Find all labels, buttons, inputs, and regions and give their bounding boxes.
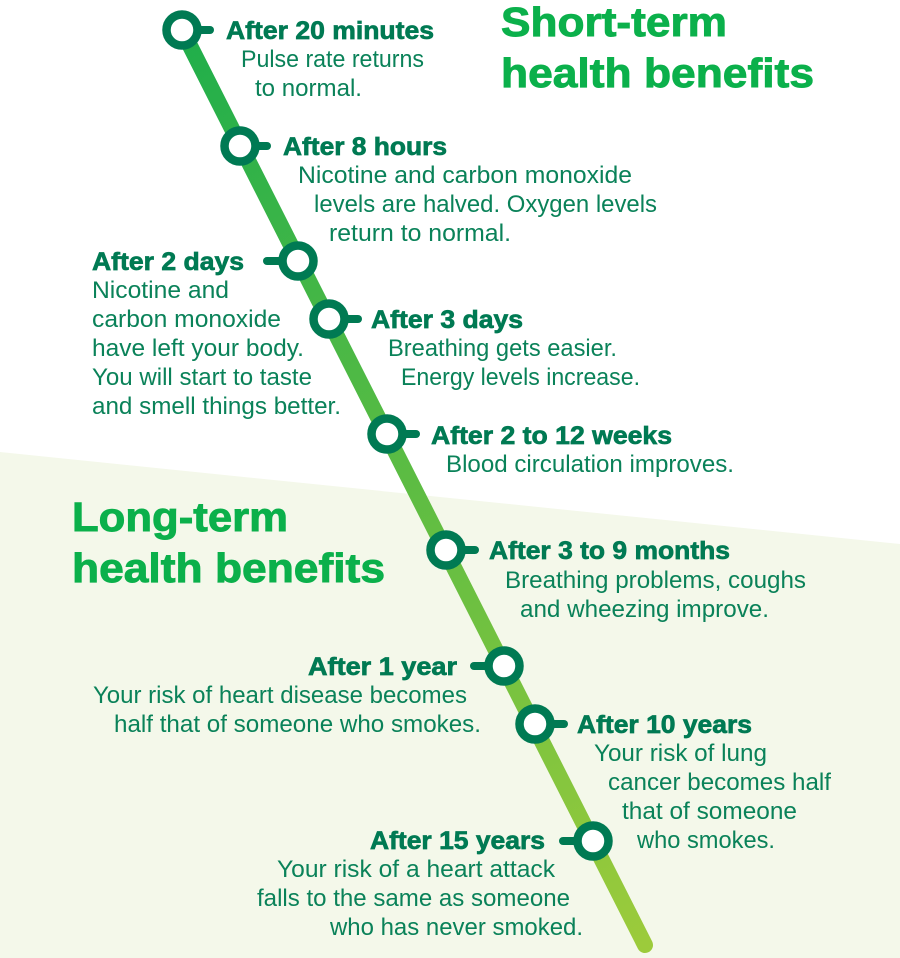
text: after 20 minutes: Pulse rate returns bbox=[241, 46, 424, 73]
text: after 2 to 12 weeks: After 2 to 12 weeks bbox=[431, 422, 672, 450]
marker: after 3 to 9 months bbox=[430, 534, 475, 566]
text: after 1 year: half that of someone who smokes. bbox=[114, 711, 481, 738]
text: after 8 hours: After 8 hours bbox=[283, 133, 447, 161]
text: after 8 hours: return to normal. bbox=[329, 220, 511, 247]
text: after 1 year bbox=[93, 653, 481, 738]
marker: after 10 years bbox=[520, 708, 564, 740]
heading: short-term health benefits: Short-term bbox=[501, 0, 727, 45]
text: after 1 year: Your risk of heart disease becomes bbox=[93, 682, 467, 709]
text: after 20 minutes bbox=[226, 17, 434, 102]
timeline line bbox=[182, 30, 645, 945]
text: after 2 days: and smell things better. bbox=[92, 393, 341, 420]
text: after 2 days: Nicotine and bbox=[92, 277, 229, 304]
text: after 1 year: After 1 year bbox=[308, 653, 457, 681]
marker: after 20 minutes bbox=[166, 14, 210, 46]
text: after 15 years: Your risk of a heart attack bbox=[277, 856, 556, 883]
text: after 2 to 12 weeks bbox=[431, 422, 734, 478]
text: after 10 years: that of someone bbox=[622, 798, 797, 825]
text: after 10 years: cancer becomes half bbox=[608, 769, 831, 796]
text: after 20 minutes: to normal. bbox=[255, 75, 362, 102]
marker: after 3 days bbox=[314, 304, 358, 334]
heading: long-term health benefits: health benefits bbox=[72, 545, 385, 591]
heading: short-term health benefits: health benefits bbox=[501, 50, 814, 96]
text: after 2 days bbox=[92, 248, 341, 420]
marker: after 2 days bbox=[267, 246, 314, 276]
text: after 15 years: who has never smoked. bbox=[329, 914, 583, 941]
text: after 3 to 9 months: Breathing problems, coughs bbox=[505, 567, 806, 594]
text: after 10 years: Your risk of lung bbox=[594, 740, 767, 767]
text: after 3 days: Energy levels increase. bbox=[401, 364, 640, 391]
text: after 2 days: have left your body. bbox=[92, 335, 304, 362]
marker: after 2 to 12 weeks bbox=[372, 418, 416, 450]
text: after 3 to 9 months bbox=[489, 537, 806, 623]
text: after 20 minutes: After 20 minutes bbox=[226, 17, 434, 45]
text: after 2 days: You will start to taste bbox=[92, 364, 312, 391]
text: after 3 days bbox=[371, 306, 640, 391]
heading: long-term health benefits: Long-term bbox=[72, 494, 288, 540]
background panel: long-term section bbox=[0, 452, 900, 958]
marker: after 1 year bbox=[474, 650, 520, 682]
marker: after 8 hours bbox=[224, 130, 267, 162]
heading: short-term health benefits bbox=[501, 0, 814, 96]
marker: after 15 years bbox=[563, 826, 608, 856]
text: after 8 hours bbox=[283, 133, 657, 247]
text: after 15 years bbox=[257, 827, 583, 941]
text: after 3 days: After 3 days bbox=[371, 306, 523, 334]
text: after 10 years bbox=[577, 711, 831, 854]
text: after 15 years: After 15 years bbox=[370, 827, 545, 855]
text: after 15 years: falls to the same as someone bbox=[257, 885, 570, 912]
text: after 10 years: who smokes. bbox=[636, 827, 775, 854]
text: after 2 days: After 2 days bbox=[92, 248, 244, 276]
text: after 3 to 9 months: and wheezing improve. bbox=[520, 596, 769, 623]
heading: long-term health benefits bbox=[72, 494, 385, 591]
text: after 8 hours: Nicotine and carbon monoxide bbox=[298, 162, 632, 189]
text: after 10 years: After 10 years bbox=[577, 711, 752, 739]
text: after 8 hours: levels are halved. Oxygen levels bbox=[314, 191, 657, 218]
text: after 2 days: carbon monoxide bbox=[92, 306, 281, 333]
text: after 3 days: Breathing gets easier. bbox=[388, 335, 617, 362]
text: after 3 to 9 months: After 3 to 9 months bbox=[489, 537, 730, 565]
text: after 2 to 12 weeks: Blood circulation improves. bbox=[446, 451, 734, 478]
